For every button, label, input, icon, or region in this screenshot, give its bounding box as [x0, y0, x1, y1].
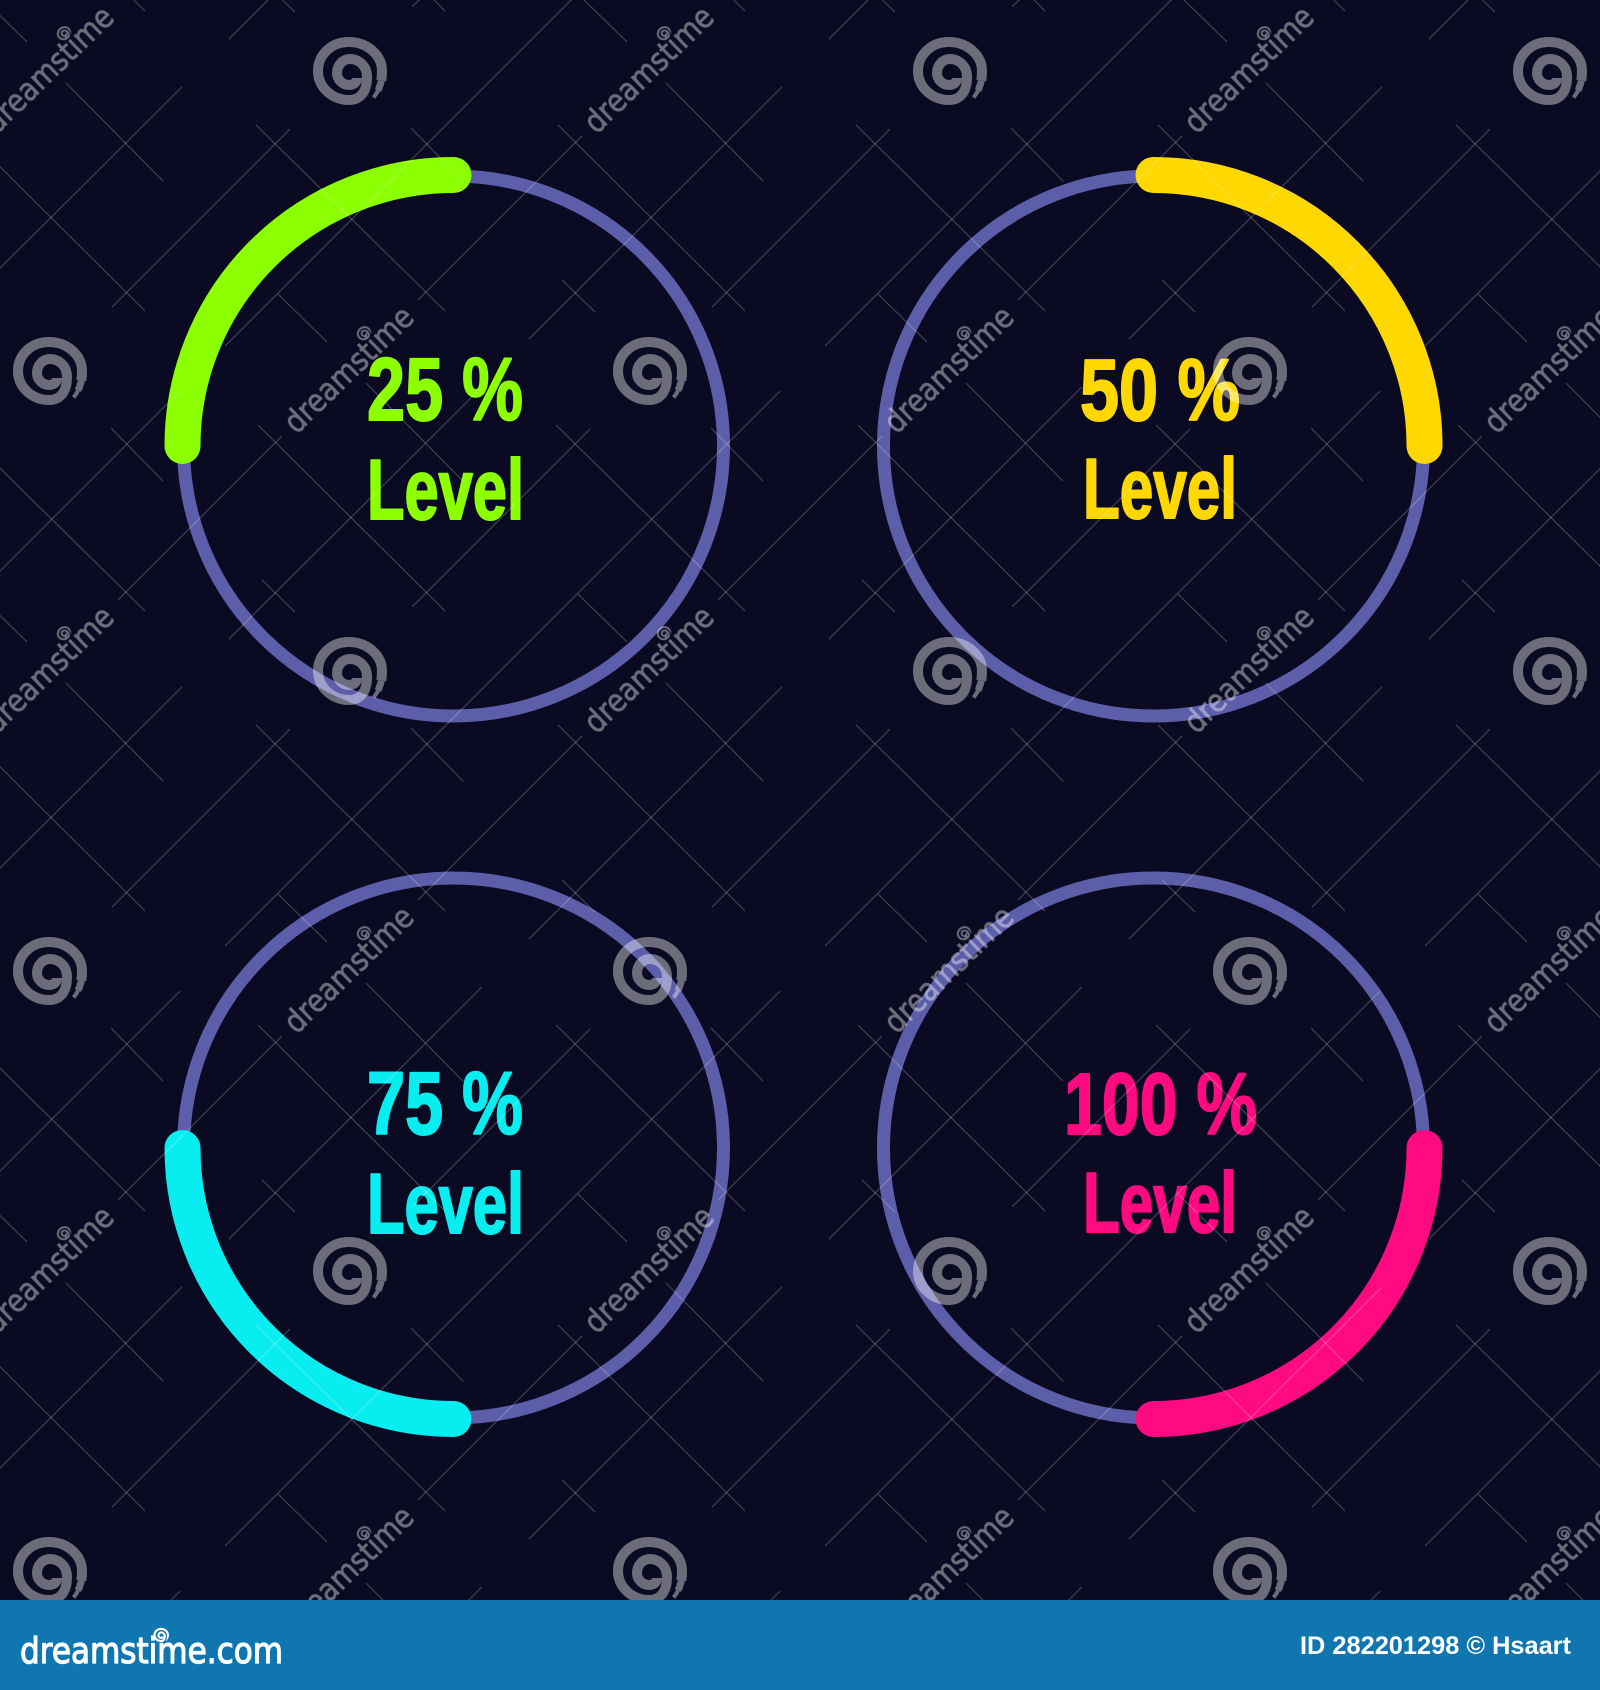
level label: Level	[1083, 1156, 1237, 1251]
watermark text: dreamstime	[1177, 599, 1321, 740]
gauge track	[884, 878, 1424, 1418]
gauge: 50 percent level	[884, 175, 1424, 716]
gauge track	[184, 176, 724, 716]
value label: 25 %	[367, 339, 523, 439]
progress arc: cyan	[182, 1148, 454, 1419]
progress arc: pink	[1154, 1148, 1424, 1419]
watermark text: dreamstime	[577, 1199, 721, 1340]
watermark text: dreamstime	[577, 599, 721, 740]
watermark text: dreamstime	[877, 1499, 1021, 1640]
watermark text: dreamstime	[277, 899, 421, 1040]
image id and author credit: ID 282201298 © Hsaart	[1300, 1632, 1572, 1660]
watermark text: dreamstime	[277, 299, 421, 440]
gauge track	[184, 878, 724, 1418]
level label: Level	[367, 1157, 524, 1252]
gauge: 100 percent level	[884, 878, 1424, 1419]
level label: Level	[1083, 442, 1237, 537]
watermark text: dreamstime	[1177, 1199, 1321, 1340]
footer bar	[0, 1600, 1600, 1690]
footer background	[0, 1600, 1600, 1690]
watermark text: dreamstime	[277, 1499, 421, 1640]
gauge: 75 percent level	[182, 878, 724, 1419]
value label: 75 %	[367, 1053, 523, 1153]
icon: footer logo spiral	[154, 1629, 168, 1641]
gauge track	[884, 176, 1424, 716]
gauge: 25 percent level	[182, 175, 724, 716]
footer logo text: dreamstime.com	[20, 1631, 283, 1672]
value label: 100 %	[1064, 1056, 1257, 1153]
watermark text: dreamstime	[877, 899, 1021, 1040]
progress arc: green	[182, 175, 454, 446]
progress arc: yellow	[1154, 175, 1424, 446]
value label: 50 %	[1080, 342, 1240, 439]
level label: Level	[367, 443, 524, 538]
watermark text: dreamstime	[877, 299, 1021, 440]
